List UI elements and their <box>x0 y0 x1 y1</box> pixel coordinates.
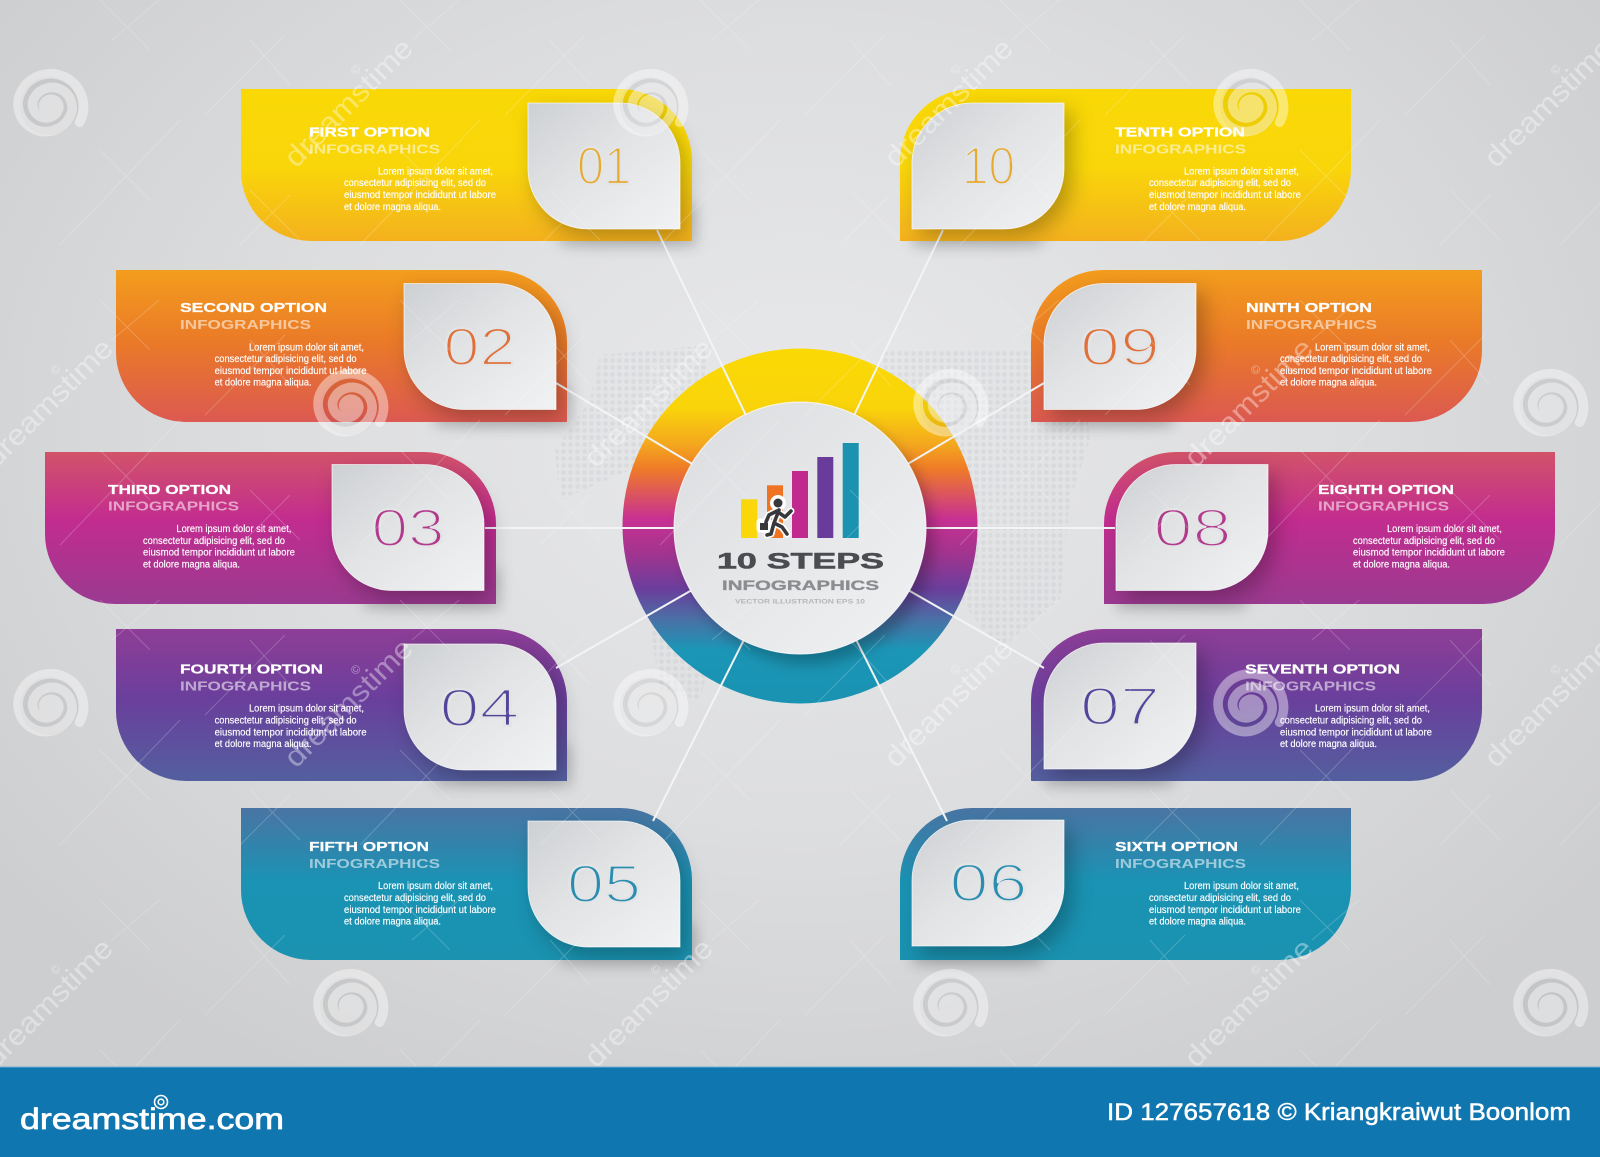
text block 04: et dolore magna aliqua. <box>215 739 312 750</box>
card 10 content <box>912 103 1301 229</box>
text block 10: consectetur adipisicing elit, sed do <box>1149 178 1291 189</box>
panel: card 10 background <box>900 89 1351 241</box>
icon: running businessman <box>760 498 791 535</box>
watermark overlay: © <box>48 362 64 378</box>
text block 05: eiusmod tempor incididunt ut labore <box>344 905 496 916</box>
leaf 05 <box>528 821 680 947</box>
text block 07: eiusmod tempor incididunt ut labore <box>1280 727 1432 738</box>
watermark overlay: dreamstime <box>1178 333 1320 474</box>
number 04: 04 <box>440 679 520 738</box>
center caption: VECTOR ILLUSTRATION EPS 10 <box>735 598 865 605</box>
panel: card 08 background <box>1104 452 1555 604</box>
watermark overlay: © <box>1548 62 1564 78</box>
text block 10: et dolore magna aliqua. <box>1149 202 1246 213</box>
watermark overlay: © <box>1248 362 1264 378</box>
text block 02: Lorem ipsum dolor sit amet, <box>249 342 364 353</box>
text block 02: consectetur adipisicing elit, sed do <box>215 354 357 365</box>
watermark overlay: dreamstime <box>278 633 420 774</box>
number 09: 09 <box>1080 318 1160 377</box>
leaf 09 <box>1044 284 1196 410</box>
subtitle 04: INFOGRAPHICS <box>180 678 311 693</box>
watermark overlay: dreamstime <box>278 33 420 174</box>
watermark overlay: © <box>648 962 664 978</box>
panel: card 02 background <box>116 270 567 422</box>
subtitle 09: INFOGRAPHICS <box>1246 317 1377 332</box>
text block 09: consectetur adipisicing elit, sed do <box>1280 354 1422 365</box>
text block 03: et dolore magna aliqua. <box>143 560 240 570</box>
title 04: FOURTH OPTION <box>180 661 323 676</box>
text block 03: consectetur adipisicing elit, sed do <box>143 536 285 547</box>
leaf 04 <box>404 644 556 770</box>
number 02: 02 <box>444 318 516 377</box>
text block 08: Lorem ipsum dolor sit amet, <box>1387 524 1502 535</box>
text block 08 <box>1353 524 1505 570</box>
panel: card 03 background <box>45 452 496 604</box>
watermark overlay: © <box>348 62 364 78</box>
text block 07: consectetur adipisicing elit, sed do <box>1280 716 1422 726</box>
card 05 content <box>309 821 680 947</box>
text block 05: consectetur adipisicing elit, sed do <box>344 893 486 904</box>
text block 05: et dolore magna aliqua. <box>344 917 441 928</box>
text block 03: Lorem ipsum dolor sit amet, <box>176 524 291 535</box>
number 05: 05 <box>567 855 641 914</box>
text block 09: et dolore magna aliqua. <box>1280 378 1377 389</box>
watermark overlay: dreamstime <box>578 333 720 474</box>
text block 02 <box>215 342 367 389</box>
footer bar <box>0 1066 1600 1157</box>
text block 09: Lorem ipsum dolor sit amet, <box>1315 342 1430 353</box>
subtitle 06: INFOGRAPHICS <box>1115 856 1246 871</box>
title 05: FIFTH OPTION <box>309 839 429 854</box>
leaf 03 <box>332 464 484 590</box>
text block 04: Lorem ipsum dolor sit amet, <box>249 704 364 715</box>
watermark overlay: © <box>948 662 964 678</box>
subtitle 01: INFOGRAPHICS <box>309 142 440 156</box>
leaf 08 <box>1116 464 1268 590</box>
panel: card 07 background <box>1031 629 1482 781</box>
number 07: 07 <box>1080 678 1160 736</box>
text block 04 <box>215 704 367 750</box>
watermark overlay: dreamstime <box>878 633 1020 774</box>
number 08: 08 <box>1154 499 1232 558</box>
title 07: SEVENTH OPTION <box>1245 661 1400 676</box>
text block 05: Lorem ipsum dolor sit amet, <box>378 881 493 892</box>
text block 02: eiusmod tempor incididunt ut labore <box>215 366 367 377</box>
text block 06 <box>1149 881 1301 928</box>
text block 09: eiusmod tempor incididunt ut labore <box>1280 366 1432 377</box>
subtitle 05: INFOGRAPHICS <box>309 856 440 871</box>
panel: card 09 background <box>1031 270 1482 422</box>
text block 10: eiusmod tempor incididunt ut labore <box>1149 190 1301 201</box>
text block 06: consectetur adipisicing elit, sed do <box>1149 893 1291 904</box>
panel: card 05 background <box>241 808 692 960</box>
title 03: THIRD OPTION <box>108 482 231 497</box>
subtitle 07: INFOGRAPHICS <box>1245 678 1376 693</box>
footer image id: ID 127657618 © Kriangkraiwut Boonlom <box>1107 1099 1571 1126</box>
center disc <box>674 402 926 654</box>
text block 04: eiusmod tempor incididunt ut labore <box>215 727 367 738</box>
text block 10 <box>1149 166 1301 213</box>
card 08 content <box>1116 464 1505 590</box>
title 10: TENTH OPTION <box>1115 125 1245 140</box>
card 01 content <box>309 103 680 229</box>
text block 04: consectetur adipisicing elit, sed do <box>215 716 357 726</box>
card 04 content <box>180 644 556 770</box>
center title: 10 STEPS <box>717 549 884 574</box>
card 09 content <box>1044 284 1432 410</box>
number 03: 03 <box>372 499 444 558</box>
subtitle 08: INFOGRAPHICS <box>1318 499 1449 514</box>
center subtitle: INFOGRAPHICS <box>722 577 879 593</box>
subtitle 10: INFOGRAPHICS <box>1115 142 1246 156</box>
text block 08: consectetur adipisicing elit, sed do <box>1353 536 1495 547</box>
text block 03 <box>143 524 295 570</box>
panel: card 04 background <box>116 629 567 781</box>
card 02 content <box>180 284 556 410</box>
watermark overlay: dreamstime <box>578 933 720 1074</box>
footer logo text: dreamstime.com <box>20 1103 284 1136</box>
title 06: SIXTH OPTION <box>1115 839 1238 854</box>
watermark overlay: dreamstime <box>878 33 1020 174</box>
leaf 02 <box>404 284 556 410</box>
title 08: EIGHTH OPTION <box>1318 482 1454 497</box>
number 10: 10 <box>962 137 1015 196</box>
text block 08: eiusmod tempor incididunt ut labore <box>1353 548 1505 559</box>
text block 10: Lorem ipsum dolor sit amet, <box>1184 166 1299 177</box>
leaf 10 <box>912 103 1064 229</box>
watermark overlay: © <box>48 962 64 978</box>
text block 01: Lorem ipsum dolor sit amet, <box>378 166 493 177</box>
subtitle 02: INFOGRAPHICS <box>180 317 311 332</box>
leaf 01 <box>528 103 680 229</box>
text block 09 <box>1280 342 1432 389</box>
title 02: SECOND OPTION <box>180 300 327 315</box>
leaf 06 <box>912 820 1064 946</box>
card soft shadows <box>364 205 1246 966</box>
icon: footer logo spiral <box>154 1096 168 1108</box>
subtitle 03: INFOGRAPHICS <box>108 499 239 514</box>
card 06 content <box>912 820 1301 946</box>
text block 06: et dolore magna aliqua. <box>1149 917 1246 928</box>
text block 02: et dolore magna aliqua. <box>215 378 312 389</box>
title 01: FIRST OPTION <box>309 125 430 140</box>
text block 07: et dolore magna aliqua. <box>1280 739 1377 750</box>
panel: card 01 background <box>241 89 692 241</box>
watermark overlay: © <box>1548 662 1564 678</box>
leaf shadows clipped to each card <box>338 111 1276 956</box>
watermark overlay: dreamstime <box>1178 933 1320 1074</box>
card 03 content <box>108 464 484 590</box>
text block 07 <box>1280 704 1432 750</box>
watermark overlay: © <box>648 362 664 378</box>
text block 01: consectetur adipisicing elit, sed do <box>344 178 486 189</box>
connector lines <box>485 230 1115 821</box>
text block 01: et dolore magna aliqua. <box>344 202 441 213</box>
text block 08: et dolore magna aliqua. <box>1353 560 1450 570</box>
watermark overlay: © <box>1248 962 1264 978</box>
watermark overlay: © <box>348 662 364 678</box>
text block 06: eiusmod tempor incididunt ut labore <box>1149 905 1301 916</box>
number 06: 06 <box>950 854 1028 913</box>
bar chart icon <box>741 443 859 538</box>
panel: card 06 background <box>900 808 1351 960</box>
text block 01: eiusmod tempor incididunt ut labore <box>344 190 496 201</box>
watermark overlay: © <box>948 62 964 78</box>
title 09: NINTH OPTION <box>1246 300 1372 315</box>
leaf 07 <box>1044 643 1196 769</box>
number 01: 01 <box>577 137 631 196</box>
dotted world map <box>555 345 1090 700</box>
text block 07: Lorem ipsum dolor sit amet, <box>1315 704 1430 715</box>
center ring <box>622 348 978 704</box>
text block 01 <box>344 166 496 213</box>
text block 05 <box>344 881 496 928</box>
card 07 content <box>1044 643 1432 769</box>
center disc shadow <box>682 412 934 664</box>
text block 03: eiusmod tempor incididunt ut labore <box>143 548 295 559</box>
text block 06: Lorem ipsum dolor sit amet, <box>1184 881 1299 892</box>
